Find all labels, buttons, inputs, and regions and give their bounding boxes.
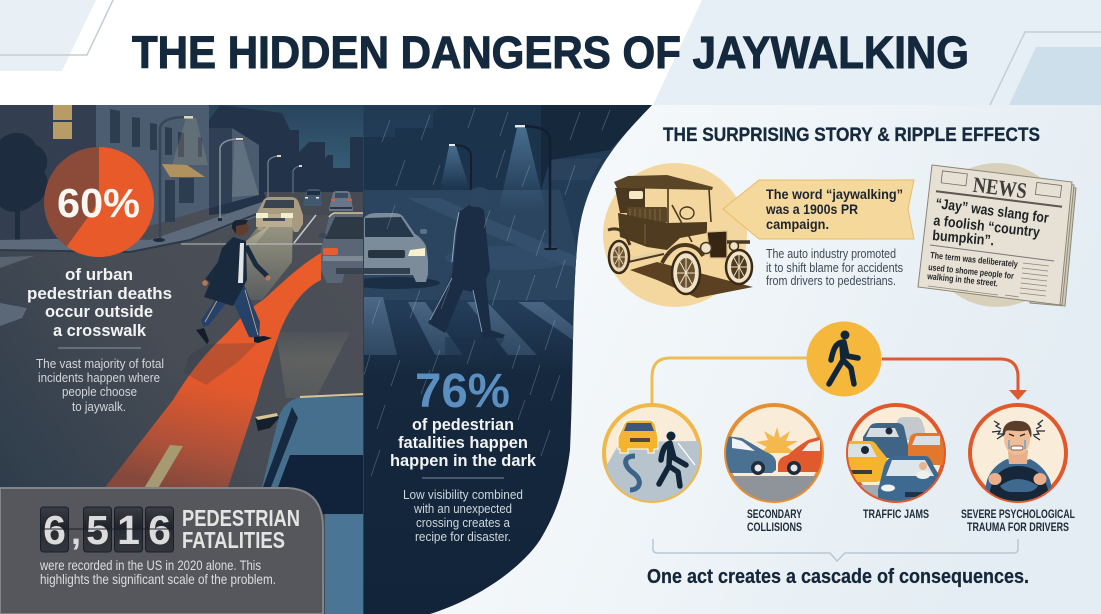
- newspaper: bumpkin”.: [932, 228, 995, 249]
- callout: jaywalking PR: The word “jaywalking”: [766, 186, 903, 202]
- stat text: dark fatalities: happen in the dark: [390, 451, 537, 470]
- description: urban incidents: [36, 356, 164, 414]
- description: urban incidents: incidents happen where: [38, 370, 160, 385]
- newspaper: a foolish “country: [933, 213, 1041, 241]
- red path: [103, 253, 321, 490]
- bracket: [653, 539, 1018, 561]
- label: secondary collisions: COLLISIONS: [747, 522, 802, 534]
- callout: jaywalking PR: campaign.: [766, 216, 829, 232]
- description: low visibility: crossing creates a: [416, 515, 511, 530]
- cascade connector: right arrow: [882, 359, 1027, 400]
- description: auto industry: The auto industry promoted: [766, 246, 896, 261]
- newspaper: [918, 163, 1076, 307]
- stat: 76%: 76%: [415, 365, 510, 418]
- tree: [0, 133, 48, 246]
- flip digit counter: 6: [148, 507, 171, 553]
- stat text: urban deaths: [27, 265, 172, 340]
- headlight beams: [246, 227, 269, 245]
- icon: collision: [724, 405, 824, 506]
- stat: 60% pie: [44, 147, 154, 257]
- flip digit counter: ,: [71, 511, 81, 552]
- tan car: [256, 197, 303, 232]
- stat text: urban deaths: occur outside: [45, 302, 153, 321]
- conclusion text: One act creates a cascade of consequences.: [647, 566, 1029, 588]
- description: fatalities: [39, 557, 276, 587]
- icon: vintage car: [603, 163, 753, 307]
- flip digit counter: 1: [117, 507, 140, 553]
- stat text: dark fatalities: [390, 415, 537, 470]
- description: low visibility: Low visibility combined: [403, 487, 523, 502]
- label: secondary collisions: [747, 509, 802, 534]
- description: urban incidents: people choose: [62, 384, 137, 399]
- stat text: urban deaths: pedestrian deaths: [27, 284, 172, 303]
- silver car: [364, 213, 440, 289]
- distant cars: [303, 189, 353, 211]
- crosswalk stripes: [363, 297, 580, 355]
- newspaper: NEWS: [972, 172, 1028, 203]
- description: fatalities: were recorded in the US in 2020 alone. This: [39, 557, 261, 573]
- street lamps: [452, 126, 550, 248]
- foreground car: [255, 394, 364, 614]
- description: urban incidents: The vast majority of fotal: [36, 356, 164, 371]
- stat text: urban deaths: a crosswalk: [53, 321, 147, 340]
- label: traffic jams: TRAFFIC JAMS: [863, 509, 929, 521]
- label: psychological trauma: [961, 509, 1075, 534]
- person crossing: [183, 220, 272, 385]
- label: secondary collisions: SECONDARY: [747, 509, 802, 521]
- newspaper: “Jay” was slang for: [934, 196, 1050, 227]
- stat text: dark fatalities: fatalities happen: [398, 433, 528, 452]
- callout: jaywalking PR: [723, 180, 914, 239]
- road lines: [181, 215, 322, 244]
- description: low visibility: recipe for disaster.: [415, 529, 511, 544]
- label: pedestrian fatalities: FATALITIES: [182, 527, 285, 553]
- newspaper: walking in the street.: [926, 271, 998, 288]
- stat text: urban deaths: of urban: [65, 265, 133, 284]
- description: low visibility: [403, 487, 523, 544]
- grey car: [319, 213, 364, 283]
- icon: walking pedestrian hub: [806, 322, 882, 396]
- description: urban incidents: to jaywalk.: [72, 399, 126, 414]
- flip digit counter: 5: [86, 507, 109, 553]
- icon: swerving car: [604, 405, 700, 505]
- label: psychological trauma: TRAUMA FOR DRIVERS: [967, 522, 1069, 534]
- right panel background: [360, 105, 1101, 614]
- yellow windows: [53, 105, 72, 139]
- flip digit counter: [40, 507, 174, 553]
- header background shapes: [0, 0, 1101, 105]
- section heading: THE SURPRISING STORY & RIPPLE EFFECTS: [663, 125, 1040, 146]
- icon: traffic jam: [848, 405, 944, 505]
- description: auto industry: from drivers to pedestrians.: [766, 273, 896, 288]
- sidewalk: [0, 202, 262, 251]
- street lights: [160, 117, 302, 240]
- description: fatalities: highlights the significant scale of the problem.: [40, 571, 276, 587]
- stat text: dark fatalities: of pedestrian: [412, 415, 514, 434]
- callout: jaywalking PR: was a 1900s PR: [765, 201, 858, 217]
- newspaper: used to shome people for: [928, 262, 1015, 281]
- panel: fatalities counter: [0, 488, 323, 614]
- stat: 60% pie: 60%: [57, 180, 140, 226]
- rain: [364, 108, 610, 476]
- icon: stressed driver: [970, 405, 1066, 505]
- title: THE HIDDEN DANGERS OF JAYWALKING: [132, 27, 969, 78]
- label: pedestrian fatalities: PEDESTRIAN: [182, 505, 300, 531]
- newspaper: The term was deliberately: [930, 250, 1018, 269]
- panel: urban street scene: [0, 105, 365, 614]
- cascade connector: left path: [652, 358, 807, 404]
- silhouette pedestrian: [428, 187, 505, 362]
- flip digit counter: 6: [43, 507, 66, 553]
- description: low visibility: with an unexpected: [413, 501, 512, 516]
- description: auto industry: it to shift blame for accidents: [766, 260, 903, 275]
- label: pedestrian fatalities: [182, 505, 300, 553]
- panel: dark rainy scene: [350, 105, 654, 614]
- description: auto industry: [766, 246, 903, 288]
